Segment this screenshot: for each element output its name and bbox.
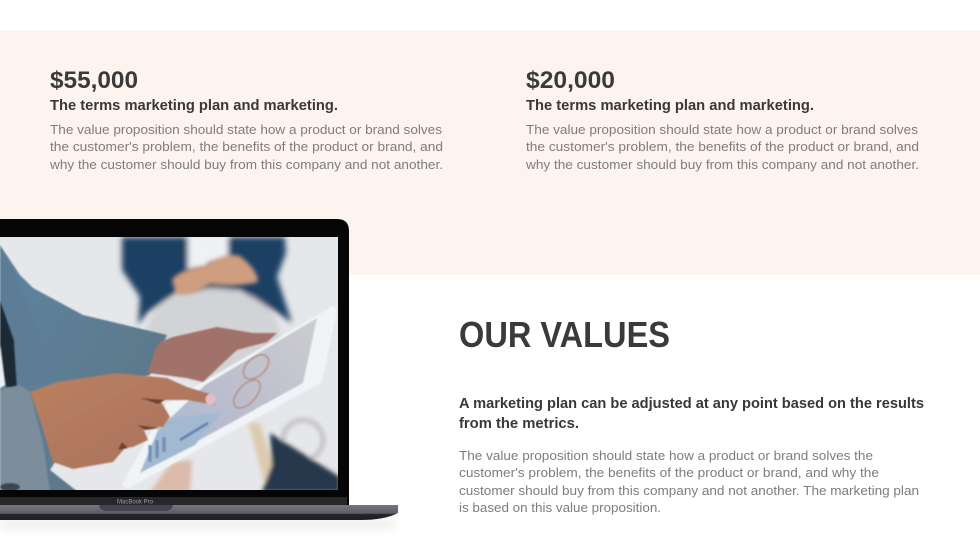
stat value: $20,000: $20,000 [526,67,615,94]
section body text: The value proposition should state how a product or brand solves the [459,448,873,463]
laptop base [0,505,398,520]
stat description left [49,122,443,172]
lower hand with pointing finger [30,373,216,469]
section body text: customer should buy from this company and not another. The marketing plan [459,483,919,498]
jacket [0,245,167,492]
stat description right: why the customer should buy from this company and not another. [525,157,919,172]
stat block: $55,000 [49,67,443,172]
section subheading: A marketing plan can be adjusted at any point based on the results [459,395,924,412]
stat description right: The value proposition should state how a product or brand solves [526,122,918,137]
stat heading left: The terms marketing plan and marketing. [50,97,338,114]
photo: hands using a tablet [0,237,340,492]
stat description left: why the customer should buy from this company and not another. [49,157,443,172]
laptop shadow [0,521,395,528]
trackpad notch [99,505,173,511]
stat description left: the customer's problem, the benefits of the product or brand, and [50,139,443,154]
section body text: customer's problem, the benefits of the product or brand, and why the [459,465,879,480]
stat description right: the customer's problem, the benefits of the product or brand, and [526,139,919,154]
stat description right [525,122,919,172]
section title: OUR VALUES [459,314,670,355]
lower bezel lip [0,497,347,505]
pink background panel [0,30,980,275]
laptop mockup with photo [0,219,398,528]
laptop brand label: MacBook Pro [117,500,154,506]
stat heading right: The terms marketing plan and marketing. [526,97,814,114]
stat description left: The value proposition should state how a product or brand solves [50,122,442,137]
tablet [122,306,337,489]
section subheading [459,395,924,432]
blurred bag and stool [150,420,340,492]
section body text [459,448,919,515]
background person's hands [172,255,258,295]
laptop lid and bezel [0,219,349,505]
section body text: is based on this value proposition. [459,500,661,515]
stat value: $55,000: $55,000 [50,67,138,94]
blurred background person [122,237,292,382]
upper hand [148,327,277,382]
section subheading: from the metrics. [459,415,579,432]
stat block: $20,000 [525,67,919,172]
